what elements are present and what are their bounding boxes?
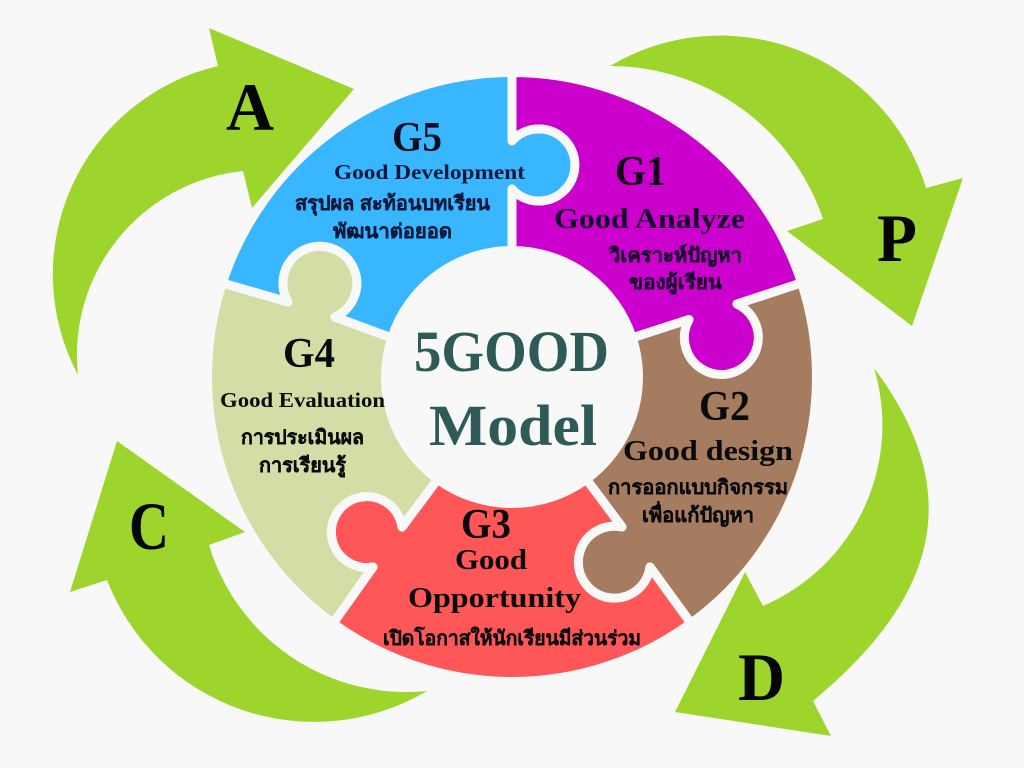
panel: G3 Good Opportunity puzzle piece: เปิดโอกาสให้นักเรียนมีส่วนร่วม <box>383 626 641 650</box>
panel: G1 Good Analyze puzzle piece <box>512 72 802 375</box>
panel: G1 Good Analyze puzzle piece: วิเคราะห์ปัญหา <box>608 244 742 267</box>
arrow: C (Check): C <box>129 488 169 564</box>
arrow: C (Check) <box>70 441 427 722</box>
panel: G1 Good Analyze puzzle piece: Good Analyze <box>554 204 745 235</box>
panel: G2 Good design puzzle piece: การออกแบบกิจกรรม <box>608 477 788 499</box>
panel: G3 Good Opportunity puzzle piece: G3 <box>461 502 511 548</box>
panel: G2 Good design puzzle piece: เพื่อแก้ปัญหา <box>642 500 754 527</box>
panel: G4 Good Evaluation puzzle piece: Good Evaluation <box>220 388 385 412</box>
panel: G3 Good Opportunity puzzle piece: Opportunity <box>408 583 581 614</box>
panel: G4 Good Evaluation puzzle piece: การเรียนรู้ <box>259 454 346 479</box>
panel: G3 Good Opportunity puzzle piece: Good <box>455 545 527 576</box>
panel: G5 Good Development puzzle piece: พัฒนาต่อยอด <box>333 221 452 243</box>
title: 5GOOD Model <box>414 319 609 458</box>
panel: G5 Good Development puzzle piece <box>222 72 575 338</box>
panel: G4 Good Evaluation puzzle piece <box>208 246 438 623</box>
arrow: P (Plan): P <box>877 200 917 276</box>
arrow: D (Do): D <box>738 639 785 715</box>
panel: G4 Good Evaluation puzzle piece: G4 <box>283 331 335 377</box>
panel: G5 Good Development puzzle piece: Good Development <box>334 160 525 184</box>
arrow: P (Plan) <box>610 36 963 326</box>
panel: G3 Good Opportunity puzzle piece <box>331 479 691 681</box>
panel: G5 Good Development puzzle piece: สรุปผล สะท้อนบทเรียน <box>295 192 490 216</box>
panel: G4 Good Evaluation puzzle piece: การประเมินผล <box>241 427 364 449</box>
panel: G5 Good Development puzzle piece: G5 <box>392 115 442 161</box>
arrow: A (Act) <box>53 28 354 375</box>
panel: G2 Good design puzzle piece <box>578 283 816 623</box>
panel: G2 Good design puzzle piece: Good design <box>623 436 793 467</box>
arrow: D (Do) <box>675 368 929 736</box>
title: 5GOOD Model: 5GOOD <box>414 319 609 384</box>
arrow: A (Act): A <box>226 69 274 145</box>
panel: G1 Good Analyze puzzle piece: G1 <box>615 149 666 195</box>
title: 5GOOD Model: Model <box>429 393 597 458</box>
panel: G2 Good design puzzle piece: G2 <box>699 384 750 430</box>
panel: G1 Good Analyze puzzle piece: ของผู้เรียน <box>629 271 722 296</box>
